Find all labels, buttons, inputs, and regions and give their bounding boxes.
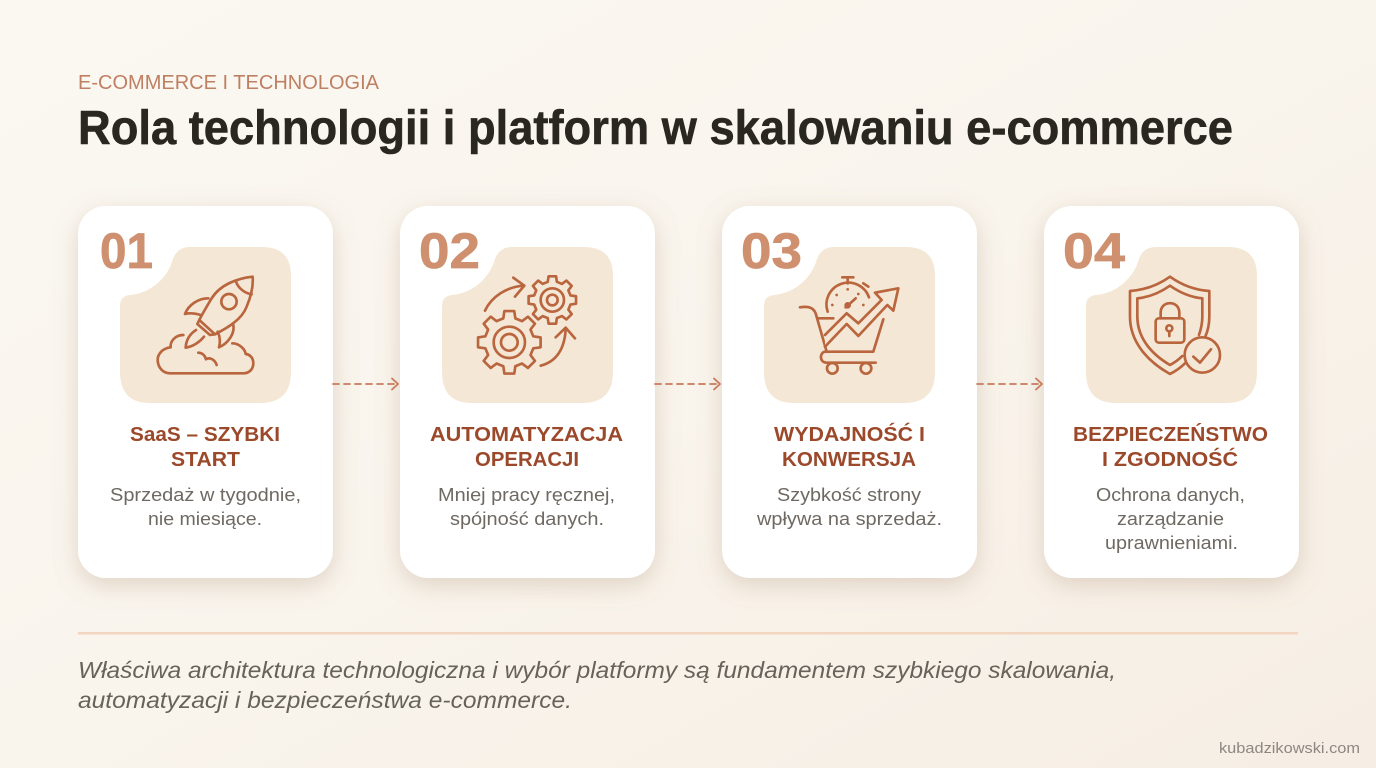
- eyebrow label: E-COMMERCE I TECHNOLOGIA: [78, 72, 380, 94]
- icon tile 02: [442, 247, 613, 403]
- panel: card 01 SaaS: [78, 206, 333, 578]
- website credit: kubadzikowski.com: [1219, 740, 1360, 757]
- description 01: Sprzedaż w tygodnie,: [110, 485, 301, 505]
- icon tile 01: [120, 247, 291, 403]
- heading 02: OPERACJI: [475, 449, 579, 471]
- heading 01: SaaS – SZYBKI: [130, 424, 280, 446]
- heading 03: WYDAJNOŚĆ I: [774, 422, 925, 446]
- heading 04: I ZGODNOŚĆ: [1102, 447, 1238, 471]
- heading 02: AUTOMATYZACJA: [430, 424, 623, 446]
- heading 01: START: [171, 449, 240, 471]
- closing statement: Właściwa architektura technologiczna i wybór platformy są fundamentem szybkiego skalowania,: [78, 657, 1116, 683]
- heading 03: KONWERSJA: [782, 449, 916, 471]
- description 03: Szybkość strony: [777, 485, 921, 505]
- title: Rola technologii i platform w skalowaniu e-commerce: [78, 102, 1233, 155]
- number 03: 03: [741, 223, 802, 279]
- icon tile 03: [764, 247, 935, 403]
- description 02: Mniej pracy ręcznej,: [438, 485, 615, 505]
- description 01: nie miesiące.: [148, 509, 262, 529]
- description 02: spójność danych.: [450, 509, 604, 529]
- arrow: card 3 to 4: [977, 378, 1042, 390]
- number 01: 01: [100, 223, 153, 279]
- description 04: zarządzanie: [1117, 509, 1224, 529]
- number 02: 02: [419, 223, 480, 279]
- panel: card 03 wydajność: [722, 206, 977, 578]
- icon: shield with lock and check: [1130, 277, 1220, 374]
- arrow: card 2 to 3: [655, 378, 720, 390]
- description 04: uprawnieniami.: [1105, 533, 1238, 553]
- panel: card 04 bezpieczeństwo: [1044, 206, 1299, 578]
- icon: cart, stopwatch, growth arrow: [800, 277, 898, 374]
- icon tile 04: [1086, 247, 1257, 403]
- description 03: wpływa na sprzedaż.: [756, 509, 942, 529]
- number 04: 04: [1063, 223, 1125, 279]
- closing statement: automatyzacji i bezpieczeństwa e-commerce.: [78, 687, 572, 713]
- panel: card 02 automatyzacja: [400, 206, 655, 578]
- heading 04: BEZPIECZEŃSTWO: [1073, 423, 1268, 446]
- icon: rocket: [158, 277, 253, 373]
- arrow: card 1 to 2: [333, 378, 398, 390]
- description 04: Ochrona danych,: [1096, 485, 1245, 505]
- icon: gears and arrows: [478, 276, 576, 374]
